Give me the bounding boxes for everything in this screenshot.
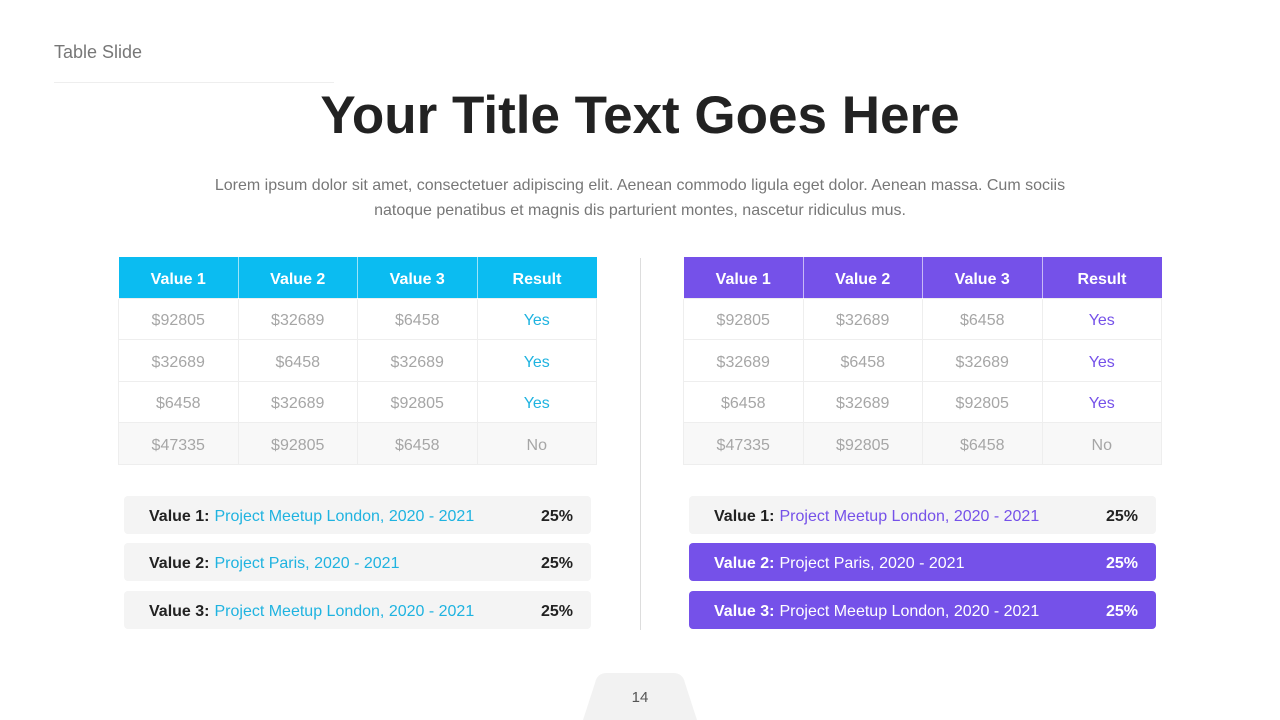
item right 1 — [689, 496, 1156, 534]
item right 1: Value 1: — [714, 508, 774, 524]
item left 3: Value 3: — [149, 602, 209, 620]
item right 2: Project Paris, 2020 - 2021 — [779, 554, 964, 572]
table: purple: $6458 — [960, 312, 1004, 329]
table: purple: Value 3 — [955, 271, 1010, 288]
table: blue: $32689 — [271, 395, 324, 412]
table: purple: $92805 — [717, 312, 770, 329]
table: purple: $32689 — [836, 312, 889, 329]
table: blue: $32689 — [152, 354, 205, 371]
table: purple: $92805 — [956, 395, 1009, 412]
table: purple: $32689 — [717, 354, 770, 371]
table: blue: $6458 — [276, 354, 320, 371]
item left 2: Project Paris, 2020 - 2021 — [214, 554, 399, 572]
table: purple: $32689 — [956, 354, 1009, 371]
table: blue: Value 1 — [151, 271, 206, 288]
item left 2: 25% — [541, 554, 573, 572]
list: right — [689, 496, 1156, 629]
item right 2 — [689, 543, 1156, 581]
table: blue: $92805 — [391, 395, 444, 412]
title: Your Title Text Goes Here — [320, 86, 960, 145]
table: purple: Yes — [1089, 395, 1115, 412]
item left 3 — [124, 591, 591, 629]
table: blue: $32689 — [391, 354, 444, 371]
table: blue: Yes — [524, 312, 550, 329]
table: purple: $92805 — [836, 437, 889, 454]
table: purple: Result — [1078, 271, 1126, 288]
table: blue: Result — [513, 271, 561, 288]
subtitle: Lorem ipsum dolor sit amet, consectetuer adipiscing elit. Aenean commodo ligula eget dolor. Aenean massa. Cum sociis natoque penatibus et magnis dis parturient montes, nascetur ridiculus mus. — [215, 177, 1065, 219]
item right 3: Project Meetup London, 2020 - 2021 — [779, 602, 1039, 620]
item left 3: Project Meetup London, 2020 - 2021 — [214, 602, 474, 620]
item left 1: Project Meetup London, 2020 - 2021 — [214, 508, 474, 524]
item right 3: 25% — [1106, 602, 1138, 620]
table: blue: No — [527, 437, 547, 454]
table: purple: $47335 — [717, 437, 770, 454]
table: purple: $6458 — [840, 354, 885, 371]
table: blue: Value 2 — [270, 271, 325, 288]
item left 3: 25% — [541, 602, 573, 620]
table: blue: $47335 — [152, 437, 205, 454]
table: purple: $32689 — [836, 395, 889, 412]
table: blue: $92805 — [152, 312, 205, 329]
table: blue: $6458 — [395, 437, 440, 454]
table: blue: $6458 — [395, 312, 440, 329]
item right 3 — [689, 591, 1156, 629]
table: purple: $6458 — [960, 437, 1004, 454]
item left 2: Value 2: — [149, 554, 209, 572]
table: blue: Value 3 — [390, 271, 445, 288]
table: purple: Value 1 — [716, 271, 771, 288]
item left 1: Value 1: — [149, 508, 209, 524]
table: purple: Value 2 — [835, 271, 890, 288]
item right 2: Value 2: — [714, 554, 774, 572]
item left 1 — [124, 496, 591, 534]
header label: Table Slide — [54, 42, 142, 62]
item right 3: Value 3: — [714, 602, 774, 620]
table: blue: $6458 — [156, 395, 200, 412]
list: left — [124, 496, 591, 629]
table: purple: Yes — [1089, 312, 1115, 329]
table: purple: Yes — [1089, 354, 1115, 371]
table: blue: Yes — [524, 395, 550, 412]
item left 1: 25% — [541, 508, 573, 524]
page number tab: 14 — [632, 689, 648, 706]
table: purple: $6458 — [721, 395, 766, 412]
item left 2 — [124, 543, 591, 581]
table: blue: Yes — [524, 354, 550, 371]
divider — [640, 258, 641, 630]
item right 1: 25% — [1106, 508, 1138, 524]
table: blue: $32689 — [271, 312, 324, 329]
table: blue — [118, 257, 597, 465]
table: purple — [683, 257, 1162, 465]
item right 2: 25% — [1106, 554, 1138, 572]
table: purple: No — [1092, 437, 1112, 454]
page number tab — [583, 673, 697, 720]
item right 1: Project Meetup London, 2020 - 2021 — [779, 508, 1039, 524]
table: blue: $92805 — [271, 437, 324, 454]
